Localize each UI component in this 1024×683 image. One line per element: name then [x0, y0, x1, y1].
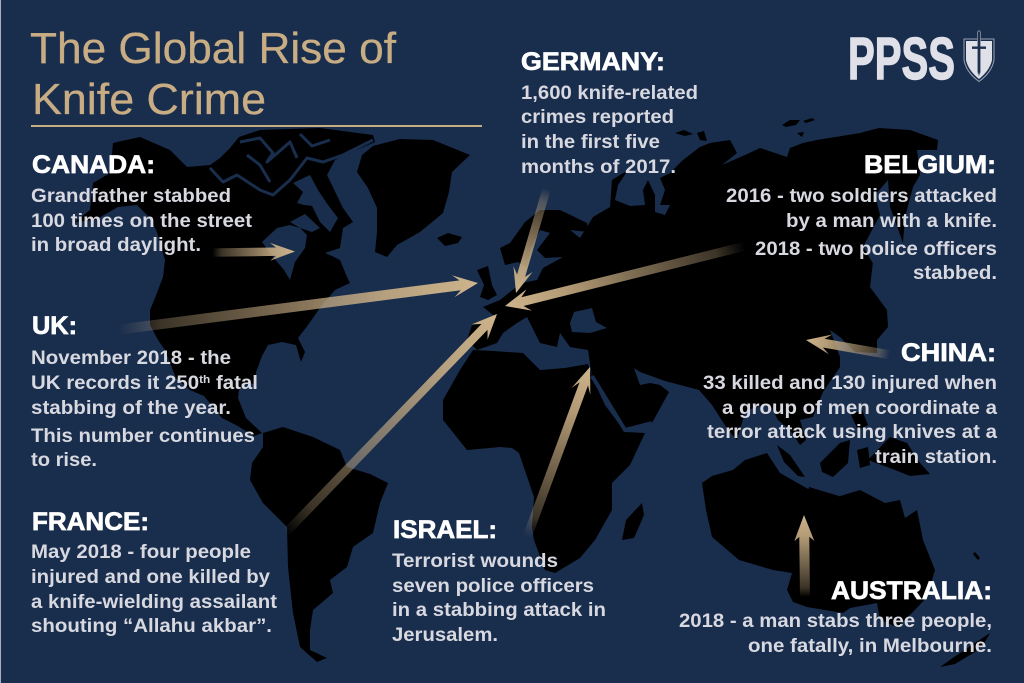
arrow: Germany [506, 186, 556, 296]
arrow: Canada [212, 243, 295, 262]
arrow: Israel [518, 364, 599, 540]
map: New Zealand [940, 633, 990, 667]
text block: Belgium: 2016 - two soldiers attacked [726, 186, 997, 207]
text block: UK: fatal [210, 373, 258, 394]
text block: Canada [31, 186, 253, 256]
map: South America [250, 427, 388, 662]
heading: France: FRANCE: [32, 508, 149, 536]
arrow: UK [117, 272, 479, 341]
text block: France: shouting “Allahu akbar”. [31, 616, 272, 637]
heading: China: CHINA: [901, 339, 996, 367]
text block: Israel: seven police officers [392, 576, 594, 597]
text block: Australia: one fatally, in Melbourne. [748, 636, 992, 657]
heading: Canada: CANADA: [32, 151, 155, 179]
text block: Canada: in broad daylight. [31, 235, 201, 256]
text block: China: train station. [875, 447, 997, 468]
text block: Australia: 2018 - a man stabs three people, [679, 611, 992, 632]
map: Sakhalin and Sea of Okhotsk gap [868, 250, 900, 280]
panel: Canada [31, 151, 253, 256]
icon: shield with sword [964, 30, 994, 82]
map: Indonesia and Philippines islands [808, 410, 980, 560]
panel: China [703, 339, 997, 468]
map: Eurasia [467, 128, 938, 445]
text block: Germany: in the first five [521, 132, 660, 153]
panel: Belgium [726, 151, 997, 284]
world map [75, 118, 990, 667]
arrow: Belgium [502, 236, 747, 317]
heading: UK: UK: [32, 312, 77, 340]
text block: China: terror attack using knives at a [707, 422, 997, 443]
heading: Germany: GERMANY: [521, 48, 665, 76]
text block: Germany: crimes reported [521, 107, 674, 128]
text block: Israel [392, 551, 606, 646]
text block: France [31, 542, 278, 637]
map: New Guinea [868, 437, 930, 476]
map: Foxe Basin and Hudson Strait [290, 175, 338, 232]
map: Australia [702, 453, 935, 627]
text block: Australia [679, 611, 992, 657]
text block: UK: November 2018 - the [31, 348, 231, 369]
text block: France: a knife-wielding assailant [31, 592, 278, 613]
map: Iceland [437, 233, 462, 246]
arrow: France [277, 306, 505, 541]
panel: Israel [392, 516, 606, 646]
text block: Belgium: by a man with a knife. [786, 211, 997, 232]
text block: Belgium: stabbed. [913, 263, 997, 284]
text block: Canada: Grandfather stabbed [31, 186, 231, 207]
text block: China: 33 killed and 130 injured when [703, 373, 997, 394]
heading: Belgium: BELGIUM: [864, 151, 996, 179]
map: North America [75, 128, 375, 436]
map: Borneo [820, 440, 850, 477]
map: Black Sea [570, 308, 607, 333]
text block: China [703, 373, 997, 468]
panel: UK [31, 312, 258, 471]
heading: Australia: AUSTRALIA: [831, 577, 992, 605]
text block: Germany: 1,600 knife-related [521, 83, 698, 104]
map: Arctic Russian islands [675, 118, 815, 141]
text block: UK: UK records it 250 [31, 373, 187, 394]
panel: France [31, 508, 278, 637]
panel: Australia [679, 577, 992, 657]
text block: Belgium [726, 186, 997, 284]
map: Madagascar [622, 503, 644, 540]
title: Knife Crime [32, 75, 266, 124]
text block: UK [31, 348, 258, 471]
text block: Belgium: 2018 - two police officers [755, 239, 997, 260]
text block: France: May 2018 - four people [31, 542, 251, 563]
text block: Israel: Jerusalem. [392, 625, 498, 646]
panel: Germany [521, 48, 698, 178]
map: Africa [443, 350, 645, 573]
map: Canadian Arctic channels [210, 134, 373, 195]
arrow: Australia [794, 515, 815, 597]
map: Hudson Bay cut-out [262, 225, 307, 280]
arrow: China [804, 330, 891, 365]
text block: Israel: Terrorist wounds [392, 551, 558, 572]
text block: UK: stabbing of the year. [31, 398, 231, 419]
title: The Global Rise of [30, 24, 397, 73]
logo: PPSS: PPSS [848, 26, 955, 92]
title [30, 24, 397, 124]
text block: UK: This number continues [31, 426, 255, 447]
text block: Germany: months of 2017. [521, 157, 676, 178]
map: Greenland [357, 139, 470, 257]
heading: Israel: ISRAEL: [393, 516, 497, 544]
text block: France: injured and one killed by [31, 567, 270, 588]
map: UK and Ireland [477, 266, 497, 300]
map: Sumatra [777, 445, 805, 477]
map: Red Sea and Gulf of Aden [592, 376, 652, 430]
text block: China: a group of men coordinate a [722, 398, 997, 419]
text block: UK: to rise. [31, 450, 97, 471]
text block: Germany [521, 83, 698, 178]
text block: Israel: in a stabbing attack in [392, 600, 606, 621]
text block: UK: th [199, 374, 211, 386]
text block: Canada: 100 times on the street [31, 211, 253, 232]
